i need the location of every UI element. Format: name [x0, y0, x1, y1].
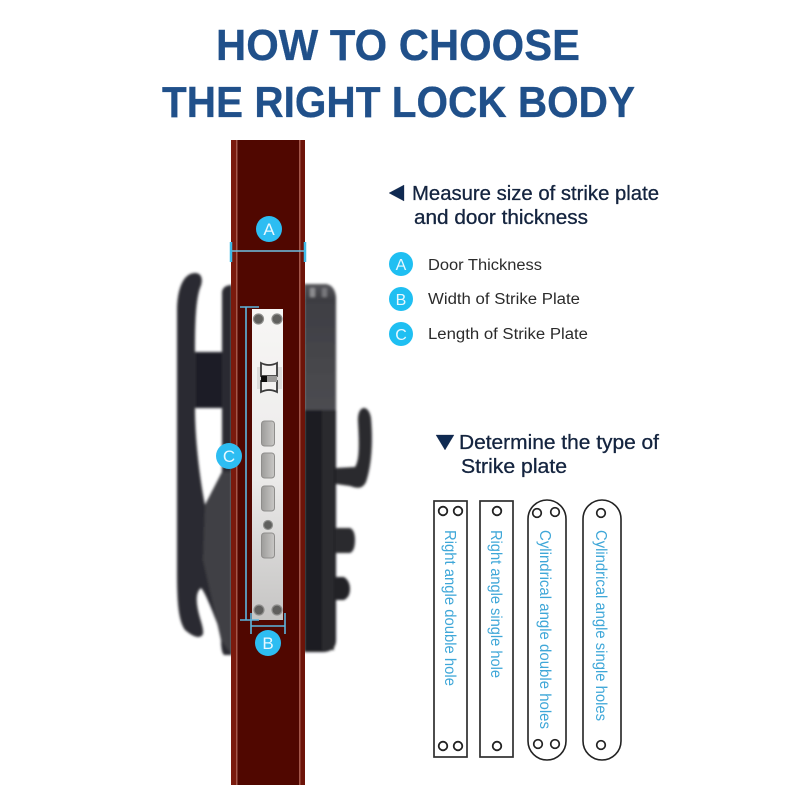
lock hardware behind door — [177, 273, 372, 655]
dimension A: A — [263, 220, 275, 239]
plate: cylindrical angle single holes: Cylindrical angle single holes — [592, 530, 609, 721]
plate: right angle double hole — [434, 501, 467, 757]
plate: right angle double hole: Right angle double hole — [441, 530, 458, 686]
left handle — [177, 273, 232, 655]
right handle — [336, 408, 372, 488]
plate: cylindrical angle single holes — [583, 500, 621, 760]
legend — [389, 252, 588, 346]
left handle neck — [196, 352, 222, 408]
heading: measure size — [389, 183, 659, 229]
heading: measure size: and door thickness — [414, 207, 588, 229]
legend item A: A — [396, 257, 407, 274]
legend item B: B — [396, 292, 406, 309]
right lock body — [304, 284, 336, 652]
dimension A — [231, 216, 305, 262]
legend item C — [389, 322, 588, 346]
plate: right angle single hole — [480, 501, 513, 757]
dimension B — [251, 613, 285, 656]
left lock panel — [203, 472, 232, 655]
slots — [262, 421, 274, 558]
legend item B: Width of Strike Plate — [428, 291, 580, 308]
legend item C: Length of Strike Plate — [428, 326, 588, 343]
dimension C — [216, 307, 259, 620]
icon: left arrow — [389, 185, 404, 201]
plate: cylindrical angle double holes: Cylindrical angle double holes — [536, 530, 553, 729]
heading: determine type: Strike plate — [461, 456, 567, 478]
dimension C: C — [223, 447, 235, 466]
dimension B: B — [262, 634, 274, 653]
legend item A — [389, 252, 542, 276]
legend item B — [389, 287, 580, 311]
title: THE RIGHT LOCK BODY — [162, 78, 635, 127]
icon: down arrow — [436, 435, 454, 450]
heading: determine type — [436, 432, 659, 478]
door — [231, 140, 305, 785]
strike plate — [252, 309, 283, 620]
side buttons — [335, 528, 355, 553]
title: HOW TO CHOOSE — [216, 21, 580, 70]
legend item C: C — [395, 327, 407, 344]
screws — [254, 314, 282, 615]
latch — [257, 363, 282, 392]
heading: measure size: Measure size of strike plate — [412, 183, 659, 205]
plate: right angle single hole: Right angle single hole — [487, 530, 504, 678]
plate: cylindrical angle double holes — [528, 500, 566, 760]
title — [162, 21, 635, 127]
heading: determine type: Determine the type of — [459, 432, 659, 454]
legend item A: Door Thickness — [428, 257, 542, 274]
